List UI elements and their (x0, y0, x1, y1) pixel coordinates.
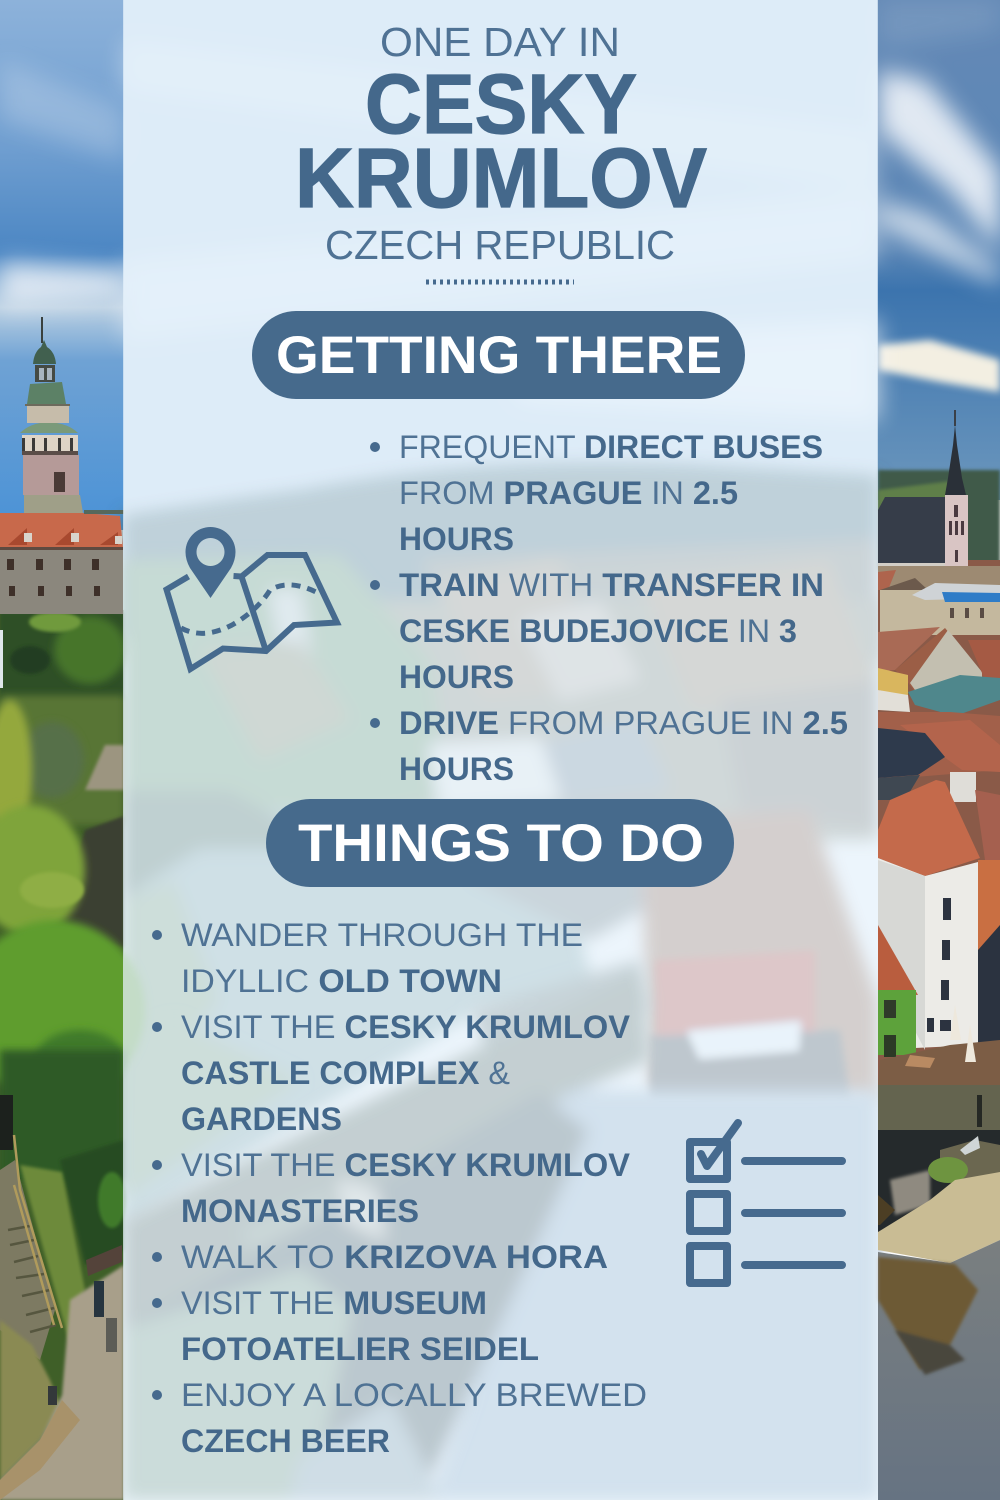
list item: train: CESKE BUDEJOVICE IN 3 (399, 613, 797, 649)
list item: direct buses: HOURS (399, 521, 514, 557)
list item: museum: VISIT THE MUSEUM (181, 1285, 487, 1321)
list item: drive: HOURS (399, 751, 514, 787)
left strip: castle building and tower (0, 317, 124, 614)
list item: old town: WANDER THROUGH THE (181, 917, 583, 953)
list item: castle complex: CASTLE COMPLEX & (181, 1055, 510, 1091)
right strip: sky-line, church and rooftops (878, 410, 1000, 1500)
list item: museum: FOTOATELIER SEIDEL (181, 1331, 539, 1367)
list item: museum (181, 1285, 539, 1367)
list item: monasteries: MONASTERIES (181, 1193, 419, 1229)
list item: czech beer: ENJOY A LOCALLY BREWED (181, 1377, 647, 1413)
dotted divider (426, 280, 574, 284)
heading pill: things to do: THINGS TO DO (298, 814, 704, 873)
list item: direct buses: FROM PRAGUE IN 2.5 (399, 475, 738, 511)
list item: train: TRAIN WITH TRANSFER IN (399, 567, 824, 603)
left strip: foliage and path (0, 610, 145, 1500)
heading pill: getting there (252, 311, 745, 399)
list item: castle complex: VISIT THE CESKY KRUMLOV (181, 1009, 631, 1045)
icon: map with location pin (166, 527, 337, 669)
icon: checklist (690, 1123, 842, 1283)
list item: old town (181, 917, 583, 999)
list item: krizova hora: WALK TO KRIZOVA HORA (181, 1239, 608, 1275)
list: things to do (152, 917, 647, 1459)
title line: czech republic: CZECH REPUBLIC (325, 222, 675, 268)
distant hills behind the panel (123, 463, 878, 660)
list item: monasteries: VISIT THE CESKY KRUMLOV (181, 1147, 631, 1183)
list item: czech beer (181, 1377, 647, 1459)
title line: cesky: CESKY (365, 57, 637, 151)
bullets (370, 442, 380, 728)
list item: direct buses: FREQUENT DIRECT BUSES (399, 429, 823, 465)
list item: direct buses (399, 429, 823, 557)
translucent central panel (123, 0, 878, 1500)
list item: monasteries (181, 1147, 631, 1229)
list item: drive (399, 705, 848, 787)
list item: drive: DRIVE FROM PRAGUE IN 2.5 (399, 705, 848, 741)
title line: krumlov: KRUMLOV (295, 131, 707, 225)
list: getting there (370, 429, 848, 787)
title block (295, 19, 707, 268)
title line: one day in: ONE DAY IN (380, 19, 620, 65)
list item: castle complex (181, 1009, 631, 1137)
list item: castle complex: GARDENS (181, 1101, 342, 1137)
bullets (152, 930, 162, 1400)
heading pill: things to do (266, 799, 734, 887)
list item: old town: IDYLLIC OLD TOWN (181, 963, 502, 999)
list item: train: HOURS (399, 659, 514, 695)
heading pill: getting there: GETTING THERE (276, 326, 722, 385)
list item: train (399, 567, 824, 695)
list item: czech beer: CZECH BEER (181, 1423, 390, 1459)
town centre, mostly veiled (123, 555, 878, 1230)
